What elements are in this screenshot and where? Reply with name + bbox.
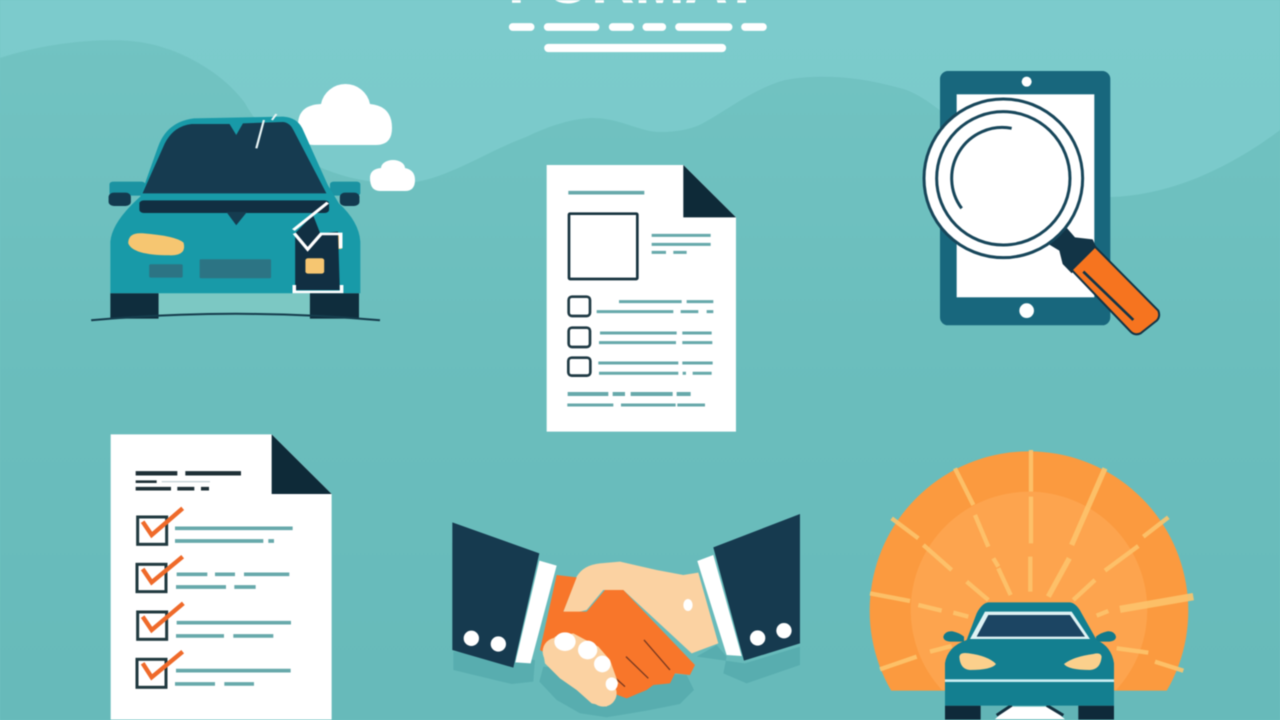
right hand xyxy=(563,562,718,653)
icon: clouds xyxy=(298,84,415,191)
folded corner xyxy=(683,165,736,217)
road xyxy=(981,706,1078,719)
car underside xyxy=(158,287,310,315)
icon: car with orange sunburst xyxy=(870,450,1193,720)
car body xyxy=(110,117,360,293)
ground line xyxy=(91,314,380,320)
wheels xyxy=(110,293,159,319)
fingers xyxy=(543,633,618,707)
hood bar xyxy=(139,200,329,213)
right sleeve xyxy=(713,514,800,661)
left hand xyxy=(540,575,695,698)
icon: tablet with magnifier xyxy=(924,71,1159,334)
tablet xyxy=(940,71,1110,325)
wheels xyxy=(945,706,981,720)
orange checks xyxy=(143,508,183,677)
folded corner xyxy=(272,434,332,494)
photo box xyxy=(569,214,637,279)
badge xyxy=(226,212,247,225)
shadow xyxy=(453,645,800,717)
car mirrors xyxy=(109,182,360,206)
icon: teal car front xyxy=(91,114,380,320)
car body xyxy=(945,602,1114,706)
sunburst xyxy=(870,451,1188,691)
nails and buttons xyxy=(464,599,792,691)
left sleeve xyxy=(452,522,539,668)
icon: handshake xyxy=(452,514,800,717)
text lines xyxy=(567,193,713,405)
sun rays xyxy=(870,450,1193,671)
heading lines xyxy=(136,473,241,489)
list text lines xyxy=(175,528,293,684)
windshield xyxy=(970,612,1090,639)
subtitle bars xyxy=(513,27,763,48)
left cuff xyxy=(515,561,557,663)
right cuff xyxy=(697,555,742,656)
panel: checklist document xyxy=(111,434,332,720)
panel: document with form xyxy=(547,165,736,432)
checkbox list xyxy=(137,517,167,687)
mirrors xyxy=(943,631,1116,642)
damaged headlight xyxy=(293,203,342,292)
bumper line xyxy=(945,679,1114,682)
grilles xyxy=(149,264,183,278)
magnifier lens xyxy=(924,99,1083,258)
wiper xyxy=(256,114,276,148)
windshield xyxy=(142,122,326,193)
magnifier handle xyxy=(1048,227,1159,334)
screen xyxy=(957,94,1094,297)
finger creases xyxy=(608,640,670,687)
headlights xyxy=(959,653,1102,670)
headlight xyxy=(128,233,184,255)
checkboxes xyxy=(568,297,590,376)
